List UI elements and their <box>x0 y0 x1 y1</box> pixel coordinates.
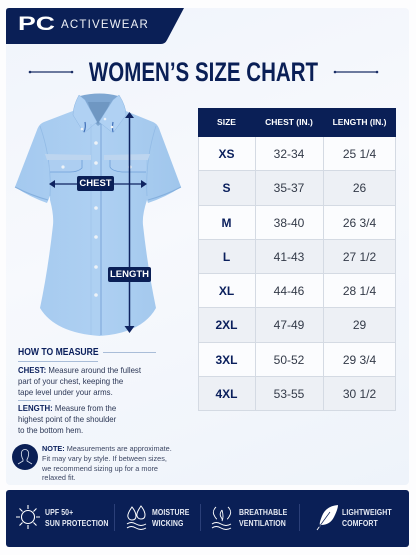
row 4XL: 30 1/2 <box>343 387 376 401</box>
title: WOMEN’S SIZE CHART <box>89 57 318 87</box>
table header: SIZE <box>217 117 236 127</box>
chest instructions: part of your chest, keeping the <box>18 376 123 386</box>
length instructions: LENGTH: Measure from the <box>18 403 116 413</box>
how to measure <box>18 347 156 435</box>
row 3XL <box>198 342 396 377</box>
icon: air waves <box>212 506 232 530</box>
feature: moisture wicking: WICKING <box>152 519 184 528</box>
row S: S <box>222 181 230 195</box>
armhole seams <box>40 126 156 196</box>
feature: lightweight comfort: COMFORT <box>342 519 378 528</box>
length instructions: highest point of the shoulder <box>18 414 116 424</box>
icon: water drops <box>126 505 146 530</box>
table header: CHEST (IN.) <box>265 117 313 127</box>
note text: relaxed fit. <box>42 473 76 482</box>
row 4XL <box>198 377 396 411</box>
feature bar <box>6 490 409 547</box>
row 4XL: 53-55 <box>274 387 304 401</box>
row 2XL: 2XL <box>215 318 238 332</box>
icon: person <box>12 444 38 470</box>
pockets <box>49 160 82 172</box>
row L: L <box>223 250 230 264</box>
feature: moisture wicking: MOISTURE <box>152 508 189 517</box>
row XS: 25 1/4 <box>343 147 376 161</box>
table header: LENGTH (IN.) <box>333 117 386 127</box>
length label <box>108 267 151 282</box>
size table <box>198 108 396 411</box>
row XS: XS <box>218 147 234 161</box>
row M: 26 3/4 <box>343 216 376 230</box>
feature: breathable ventilation: BREATHABLE <box>239 508 287 517</box>
row S <box>198 171 396 206</box>
note <box>12 444 172 482</box>
chest label <box>77 176 114 191</box>
row XL <box>198 274 396 308</box>
brand name: ACTIVEWEAR <box>61 19 149 31</box>
table header <box>198 108 396 137</box>
icon: sun <box>16 505 40 529</box>
heading: HOW TO MEASURE <box>18 347 99 358</box>
feature: sun protection: SUN PROTECTION <box>45 519 108 528</box>
row XL: 44-46 <box>274 284 304 298</box>
chest instructions: CHEST: Measure around the fullest <box>18 365 141 375</box>
row M: M <box>222 216 232 230</box>
note text: NOTE: Measurements are approximate. <box>42 444 172 453</box>
feature: lightweight comfort: LIGHTWEIGHT <box>342 508 392 517</box>
row L: 41-43 <box>274 250 304 264</box>
row XL: 28 1/4 <box>343 284 376 298</box>
logo text: PC <box>18 14 55 35</box>
note text: Fit may vary by style. If between sizes, <box>42 454 167 463</box>
chest instructions: tape level under your arms. <box>18 387 113 397</box>
row S: 26 <box>353 181 366 195</box>
placket <box>100 124 102 335</box>
row XL: XL <box>219 284 234 298</box>
brand banner <box>6 8 184 44</box>
note text <box>42 444 172 482</box>
row 3XL: 50-52 <box>274 352 304 366</box>
row 2XL: 29 <box>353 318 366 332</box>
row S: 35-37 <box>274 181 304 195</box>
inner collar <box>80 94 118 126</box>
chest arrow <box>52 183 144 185</box>
feature: lightweight comfort <box>316 505 392 530</box>
shirt silhouette <box>15 109 181 336</box>
feature: breathable ventilation <box>212 506 287 530</box>
feature: moisture wicking <box>126 505 190 530</box>
row M: 38-40 <box>274 216 304 230</box>
chest instructions <box>18 365 141 397</box>
feature: sun protection: UPF 50+ <box>45 508 73 517</box>
row 3XL: 3XL <box>215 352 238 366</box>
length arrow <box>128 114 130 331</box>
note text: we recommend sizing up for a more <box>42 464 158 473</box>
chest label: CHEST <box>79 178 112 189</box>
shirt illustration <box>14 94 182 336</box>
icon: feather <box>316 505 338 530</box>
length label: LENGTH <box>110 269 149 280</box>
collar <box>73 95 97 133</box>
feature: sun protection <box>16 505 108 529</box>
row L <box>198 240 396 274</box>
row 3XL: 29 3/4 <box>343 352 376 366</box>
row 2XL: 47-49 <box>274 318 304 332</box>
length instructions: to the bottom hem. <box>18 425 83 435</box>
yoke band <box>45 154 150 160</box>
row M <box>198 206 396 240</box>
feature: breathable ventilation: VENTILATION <box>239 519 286 528</box>
row L: 27 1/2 <box>343 250 376 264</box>
row 4XL: 4XL <box>215 387 238 401</box>
row 2XL <box>198 308 396 342</box>
length instructions <box>18 403 116 435</box>
row XS: 32-34 <box>274 147 304 161</box>
row XS <box>198 137 396 171</box>
